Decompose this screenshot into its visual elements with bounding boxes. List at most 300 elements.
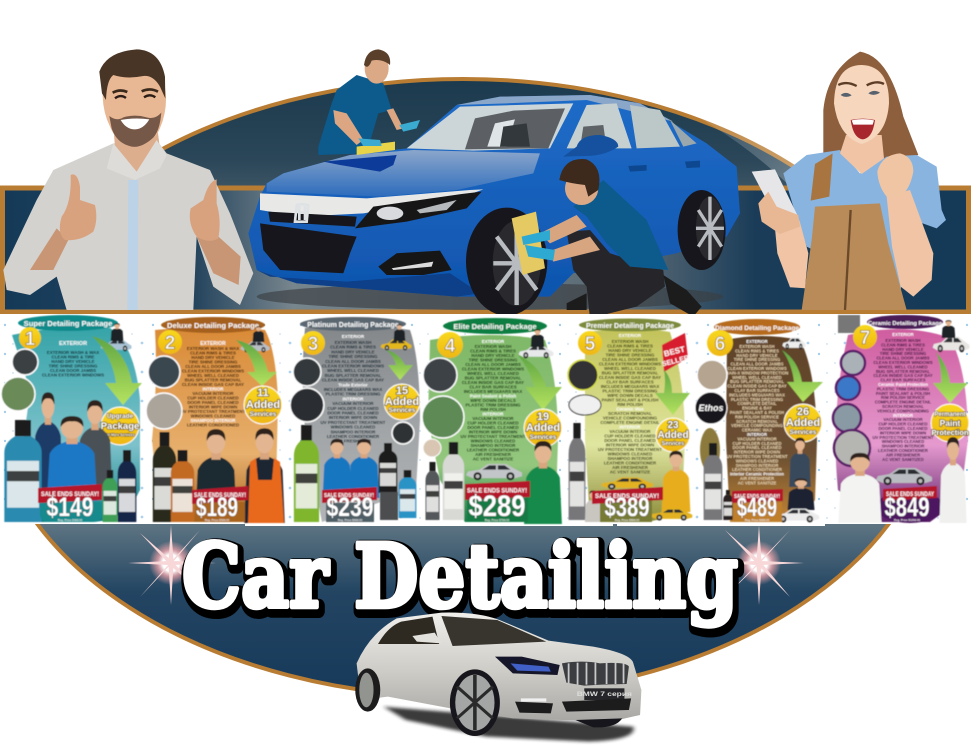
service list: Paint Sealant & Polish	[470, 394, 516, 398]
overalls zip	[845, 210, 851, 310]
silver car	[466, 464, 522, 480]
grille slats	[569, 663, 624, 685]
service list: CLEAN RIMS & TIRES	[735, 348, 779, 353]
service list: EXTERIOR WASH & WAX	[187, 346, 239, 351]
price base	[600, 500, 652, 522]
service list: INTERIOR WIPE DOWN	[880, 430, 926, 435]
service list: INTERIOR	[620, 424, 641, 430]
service list: AIR FRESHENER	[335, 439, 372, 444]
badge label: Services	[662, 441, 684, 447]
service list: WHEEL WELL CLEANED	[187, 373, 239, 378]
price: $149	[46, 492, 94, 522]
service list: EXTERIOR WASH & WAX	[47, 350, 99, 355]
service list: AC VENT SANITIZED	[882, 457, 924, 462]
service list: EXTERIOR WASH	[885, 338, 921, 343]
service list: WHEEL WELL CLEANED	[604, 366, 656, 371]
badge count: 19	[537, 411, 549, 423]
rear rim spokes	[696, 197, 724, 260]
title: Car Detailing	[182, 524, 740, 632]
service list: INTERIOR WIPE DOWN	[734, 450, 780, 455]
fist	[877, 153, 913, 197]
service list: DOOR PANEL CLEANED	[187, 400, 239, 405]
white car	[774, 509, 819, 522]
price: $849	[884, 492, 930, 522]
service list: CLEAN ALL DOOR JAMBS	[876, 356, 930, 361]
price: $239	[326, 492, 374, 522]
badge label: Added	[246, 399, 280, 411]
service list: HAND DRY VEHICLE	[471, 353, 515, 358]
service list: AIR FRESHENER	[886, 452, 920, 457]
right fist	[190, 179, 220, 241]
service list: WIPE DOWN DECALS	[470, 398, 516, 403]
panel: Premier Detailing Package	[568, 318, 692, 522]
service list: BUG SPLATTER REMOVAL	[185, 378, 242, 382]
service list: INCLUDES MEGUIARS WAX	[601, 384, 659, 389]
service list: SHAMPOO INTERIOR	[608, 456, 653, 461]
service list: TIRE SHINE DRESSING	[189, 360, 238, 364]
service list: CLEAN ALL DOOR JAMBS	[465, 362, 521, 367]
photo: wash	[423, 358, 457, 392]
service list: WINDOWS CLEANED	[331, 425, 375, 430]
front wheel	[450, 669, 500, 736]
service list: COMPLETE ENGINE DETAIL	[600, 420, 660, 425]
service list: HAND DRY VEHICLE	[51, 359, 95, 364]
service list: WHEEL WELL CLEANED	[327, 368, 379, 373]
service list: BUG SPLATTER REMOVAL	[325, 373, 382, 378]
service list: BUG SPLATTER REMOVAL	[465, 376, 522, 380]
service list: VACUUM INTERIOR	[737, 436, 777, 441]
sale banner	[465, 481, 530, 500]
DRL strip	[521, 698, 546, 702]
service list: ENGINE & BAY	[742, 406, 772, 411]
badge label: Services	[389, 407, 416, 414]
wax tin	[569, 395, 601, 415]
service list: LEATHER CONDITIONER	[467, 448, 520, 452]
man left	[838, 453, 882, 523]
price: $289	[468, 490, 526, 523]
badge count: 26	[797, 406, 809, 418]
package background shape	[428, 335, 558, 522]
panel: Deluxe Detailing Package	[146, 317, 285, 523]
neck	[113, 123, 159, 178]
worker two head	[565, 172, 598, 205]
panel: Platinum Detailing Package	[290, 317, 420, 522]
man customer	[788, 478, 814, 510]
service list: CLAY BAR SURFACES	[469, 384, 517, 390]
badge label: Services	[250, 411, 277, 418]
service list: INTERIOR WIPE DOWN	[189, 404, 237, 410]
service list: INTERIOR	[747, 432, 767, 437]
badge count: 15	[396, 385, 408, 397]
sale text: SALE ENDS SUNDAY!	[324, 493, 374, 499]
overalls strap	[811, 153, 833, 201]
photo: steering	[392, 422, 414, 444]
sale text: SALE ENDS SUNDAY!	[467, 488, 527, 494]
badge label: Upgrade	[107, 413, 134, 420]
service list: DOOR PANEL CLEANED	[327, 410, 379, 416]
car shadow	[383, 707, 634, 742]
service list: TIRE SHINE DRESSING	[734, 357, 780, 362]
hood	[267, 150, 540, 197]
sale banner	[883, 486, 937, 501]
number badge	[158, 330, 182, 354]
badge label: Services	[530, 434, 557, 441]
worker two trousers	[567, 230, 665, 318]
badge label: Package	[101, 421, 139, 432]
regular price: Reg. Price $999.00	[745, 518, 770, 522]
service list: CLEAN RIMS & TIRE	[52, 354, 95, 360]
man right	[940, 437, 966, 523]
front seat headrest	[580, 125, 607, 148]
phone	[752, 169, 797, 220]
woman face	[834, 65, 889, 144]
regular price: Reg. Price $699.00	[338, 518, 363, 522]
left forearm	[30, 228, 68, 270]
service list: INTERIOR WIPE DOWN	[329, 415, 377, 420]
service list: WINDOWS CLEANED	[191, 414, 235, 418]
woman shirt	[783, 150, 946, 293]
bottle dark	[153, 432, 176, 522]
package heading pill	[18, 315, 118, 331]
worker two gloves	[522, 230, 555, 261]
service list: CLEAN RIMS & TIRES	[470, 348, 516, 354]
woman brows	[838, 82, 884, 86]
green arrow	[518, 355, 562, 410]
sale banner	[322, 487, 377, 503]
woman overalls	[802, 203, 907, 310]
service list: PLASTIC TRIM DRESSING	[731, 397, 783, 402]
service list: EXTERIOR	[59, 341, 87, 347]
bottle spray	[118, 450, 136, 522]
service list: RIM POLISH	[480, 407, 506, 412]
service list: WHEEL WELL CLEANED	[878, 364, 928, 369]
headlight	[495, 657, 560, 675]
service list: AIR FRESHENER	[475, 452, 512, 457]
ethos logo	[695, 392, 727, 424]
rear wheel	[355, 668, 380, 712]
side window rear	[630, 105, 680, 148]
service list: AC VENT SANITIZE	[473, 456, 513, 462]
accessory dark	[380, 492, 398, 520]
service list: UV PROTECTION TREATMENT	[872, 435, 934, 440]
photo: uv coat	[833, 404, 861, 432]
price: $489	[737, 492, 777, 522]
bottle top	[838, 315, 860, 333]
worker two hair	[559, 159, 599, 197]
woman mouth	[851, 119, 875, 139]
oval fade top right	[640, 60, 971, 186]
photo: garage	[834, 430, 870, 466]
worker two torso	[573, 180, 668, 270]
service list: CLEAN RIMS & TIRES	[330, 345, 376, 350]
badge disc	[656, 418, 690, 452]
photo: car outside	[1, 377, 35, 411]
service list: CLEAN RIMS & TIRES	[607, 344, 653, 348]
service list: Trade Exterior	[338, 382, 368, 387]
service list: PAINT SEALANT & POLISH	[602, 398, 658, 402]
fog lamp strip	[392, 262, 433, 270]
service list: EXTERIOR	[482, 339, 505, 344]
service list: CLEAN INSIDE GAS CAP BAY	[873, 373, 933, 378]
upper grille	[268, 212, 357, 227]
service list: Ceramic Wax	[616, 406, 644, 412]
headlight strip	[417, 200, 457, 213]
service list: VEHICLE COMPOUNDING	[877, 408, 929, 413]
service list: RAIN-X WINDOW PROTECTION	[726, 370, 788, 375]
best seller badge	[661, 333, 690, 372]
mini person	[394, 324, 405, 341]
number badge	[707, 330, 733, 356]
service list: SHAMPOO INTERIOR	[882, 444, 924, 449]
rear wheel	[678, 190, 726, 270]
eyes	[115, 95, 155, 98]
service list: CLEAN RIMS & TIRES	[190, 350, 236, 356]
headlight ring	[511, 663, 551, 672]
service list: EXTERIOR	[342, 334, 365, 339]
service list: PLASTIC TRIM DRESSING	[466, 402, 521, 408]
side window front	[567, 103, 632, 148]
front right tyre	[575, 718, 622, 727]
sale text: SALE ENDS SUNDAY	[886, 492, 934, 498]
price base	[733, 502, 782, 522]
right forearm	[197, 235, 241, 285]
bottle small	[103, 470, 117, 522]
windshield	[441, 616, 546, 646]
person right	[78, 400, 112, 491]
fog lamp	[378, 251, 452, 275]
service list: PAINT SEALANT & POLISH	[730, 410, 784, 415]
service list: HAND DRY VEHICLE	[882, 347, 924, 352]
customer woman	[585, 490, 601, 522]
service list: AIR FRESHENER	[612, 465, 649, 470]
interior	[465, 108, 565, 149]
smile	[121, 118, 149, 129]
service list: VEHICLE COMPOUNDING	[731, 423, 783, 428]
mini person	[942, 320, 955, 338]
front rim	[493, 221, 541, 306]
photo: seat glove	[697, 360, 727, 390]
badge label: Protection	[931, 428, 969, 437]
quarter window	[670, 120, 697, 147]
mini car	[240, 341, 270, 352]
package heading pill	[161, 317, 265, 333]
number plate text: BMW 7 серия	[577, 690, 632, 698]
added services badge	[524, 409, 562, 447]
service list: CLEAN DOOR JAMBS	[50, 368, 96, 373]
worker two forearms	[540, 215, 600, 262]
panel: Ceramic Detailing Package	[833, 315, 969, 523]
service list: COMPLETE ENGINE DETAIL	[875, 400, 932, 405]
service list: CLEAN INSIDE GAS CAP BAY	[727, 384, 787, 389]
photo: paint gloss	[841, 351, 865, 375]
service list: WINDOWS CLEANED	[471, 438, 515, 444]
package heading pill	[579, 318, 681, 332]
sale banner	[732, 489, 783, 503]
sponge	[512, 212, 545, 275]
green arrow	[655, 370, 690, 415]
regular price: Reg. Price $799.00	[485, 518, 510, 522]
service list: EXTERIOR	[892, 332, 914, 337]
front wheel	[466, 208, 547, 316]
service list: Ceramic Paint Protection	[878, 382, 928, 387]
price base	[467, 498, 528, 522]
service list: DOOR PANEL CLEANED	[879, 426, 927, 431]
service list: EXTERIOR WASH	[475, 344, 511, 349]
package heading pill	[300, 317, 406, 331]
price base	[40, 502, 102, 522]
mini car	[519, 346, 553, 358]
service list: CUP HOLDER CLEANED	[327, 406, 379, 411]
service list: SHAMPOO INTERIOR	[471, 443, 516, 448]
service list: CLEAN ALL DOOR JAMBS	[602, 357, 658, 362]
service list: DOOR PANEL CLEANED	[604, 438, 656, 443]
service list: EXTERIOR WASH	[612, 339, 648, 344]
service list: VACUUM INTERIOR	[883, 417, 923, 422]
service list: LEATHER CONDITIONER	[732, 467, 782, 472]
worker one hair	[364, 49, 390, 67]
service list: CLEAN ALL DOOR JAMBS	[185, 364, 241, 369]
service list: CLAY BAR SURFACES	[606, 380, 654, 384]
service list: UV PROTECTANT TREATMENT	[181, 409, 246, 414]
lower lip	[257, 270, 480, 297]
honda badge	[295, 204, 308, 222]
service list: CLEAN INSIDE GAS CAP BAY	[599, 375, 661, 380]
badge shape	[662, 333, 688, 372]
badge label: Services	[790, 429, 817, 436]
background oval with gold rim	[0, 79, 937, 697]
number: 1	[25, 329, 36, 350]
service list: AIR FRESHENER	[740, 476, 774, 481]
woman right arm	[887, 190, 933, 297]
hero band with gold border	[2, 188, 968, 312]
sale text: SALE ENDS SUNDAY!	[734, 494, 780, 500]
service list: EXTERIOR WASH	[739, 344, 775, 349]
service list: WHEEL WELL CLEANED	[467, 371, 519, 376]
service list: INCLUDES MEGUIARS WAX	[729, 392, 785, 397]
man in green	[524, 441, 562, 524]
service list: LEATHER CONDITIONER	[327, 434, 380, 439]
hand on phone	[758, 192, 800, 234]
left fist	[60, 174, 96, 240]
badge disc	[524, 409, 562, 447]
sale text: SALE ENDS SUNDAY!	[41, 491, 99, 498]
number badge	[578, 331, 602, 355]
badge disc	[101, 407, 139, 445]
chrome bar	[260, 189, 483, 217]
front tire	[466, 208, 547, 316]
package heading: Diamond Detailing Package	[715, 325, 799, 332]
added services badge	[244, 386, 282, 424]
car body	[248, 95, 740, 297]
green arrow	[236, 340, 277, 386]
service list: WINDOWS CLEANED	[882, 439, 924, 444]
ethos logo text: Ethos	[698, 403, 724, 413]
service list: SCRATCH REMOVAL	[736, 419, 778, 424]
number badge	[19, 327, 41, 349]
person centre	[47, 416, 97, 501]
service list: HAND DRY VEHICLE	[331, 349, 375, 354]
mini car	[101, 339, 131, 351]
service list: VACUUM INTERIOR	[609, 429, 651, 434]
service list: CLEAN EXTERIOR WINDOWS	[873, 360, 933, 365]
badge label: Added	[786, 417, 820, 429]
service list: RIM POLISH SERVICE	[881, 395, 925, 400]
service list: HAND DRY VEHICLE	[736, 353, 778, 358]
sale banner	[192, 486, 248, 504]
service list: TIRE SHINE DRESSING	[606, 352, 655, 358]
photo: car and palm	[422, 396, 464, 438]
bottle grey	[426, 462, 440, 520]
badge label: Added	[657, 430, 689, 441]
headlight lens	[377, 207, 403, 220]
glow	[149, 541, 193, 585]
service list: DOOR PANEL CLEANED	[733, 445, 781, 450]
added services badge	[656, 418, 690, 452]
badge disc	[384, 384, 420, 420]
mini car	[782, 337, 806, 349]
mini suv	[933, 337, 969, 352]
service list: AC VENT SANITIZE	[610, 470, 650, 474]
badge label: Added	[526, 422, 560, 434]
service list: TIRE SHINE DRESSING	[49, 364, 98, 368]
worker figure	[244, 428, 285, 523]
body	[357, 613, 641, 722]
photo: customer	[423, 439, 441, 457]
package heading: Deluxe Detailing Package	[167, 321, 259, 330]
green arrow	[386, 350, 413, 380]
windshield	[407, 103, 573, 151]
side window	[378, 617, 439, 644]
service list: DOOR PANEL CLEANED	[467, 425, 519, 430]
green arrow	[782, 350, 823, 402]
white package strip background	[0, 314, 971, 524]
small bottle	[723, 490, 733, 520]
headlight	[355, 192, 482, 228]
car floor shadow	[257, 283, 723, 310]
number: 7	[860, 328, 870, 349]
glow	[737, 541, 781, 585]
bottle blue	[399, 470, 416, 518]
number: 5	[585, 334, 596, 355]
roof highlight	[457, 95, 673, 122]
package background shape	[585, 329, 685, 522]
front rim spokes	[493, 222, 540, 305]
service list: CUP HOLDER CLEANED	[604, 434, 656, 438]
service list: UV PROTECTION TREATMENT	[598, 447, 662, 452]
package background shape	[836, 329, 968, 522]
woman neck	[840, 135, 884, 174]
hero: excited woman with phone	[752, 52, 946, 310]
regular price: Reg. Price $899.00	[615, 518, 640, 522]
mini person	[253, 326, 264, 342]
worker one gloves	[358, 120, 420, 146]
service list: CLEAN EXTERIOR WINDOWS	[42, 372, 104, 378]
woman hair back	[823, 52, 918, 163]
added services badge	[384, 384, 420, 420]
worker two shoes	[567, 275, 702, 317]
service list: WIPE DOWN DECALS	[607, 393, 653, 398]
mirror	[412, 633, 441, 643]
mini car	[381, 339, 411, 350]
person left	[34, 392, 62, 491]
rays	[128, 525, 216, 605]
worker left	[323, 439, 351, 498]
service list: CLAY BAR SURFACES	[734, 388, 780, 393]
silver BMW car	[355, 613, 641, 742]
service list: PLASTIC TRIM DRESSING	[877, 386, 929, 391]
worker in orange overalls	[244, 428, 285, 523]
badge text: BEST	[663, 345, 686, 359]
